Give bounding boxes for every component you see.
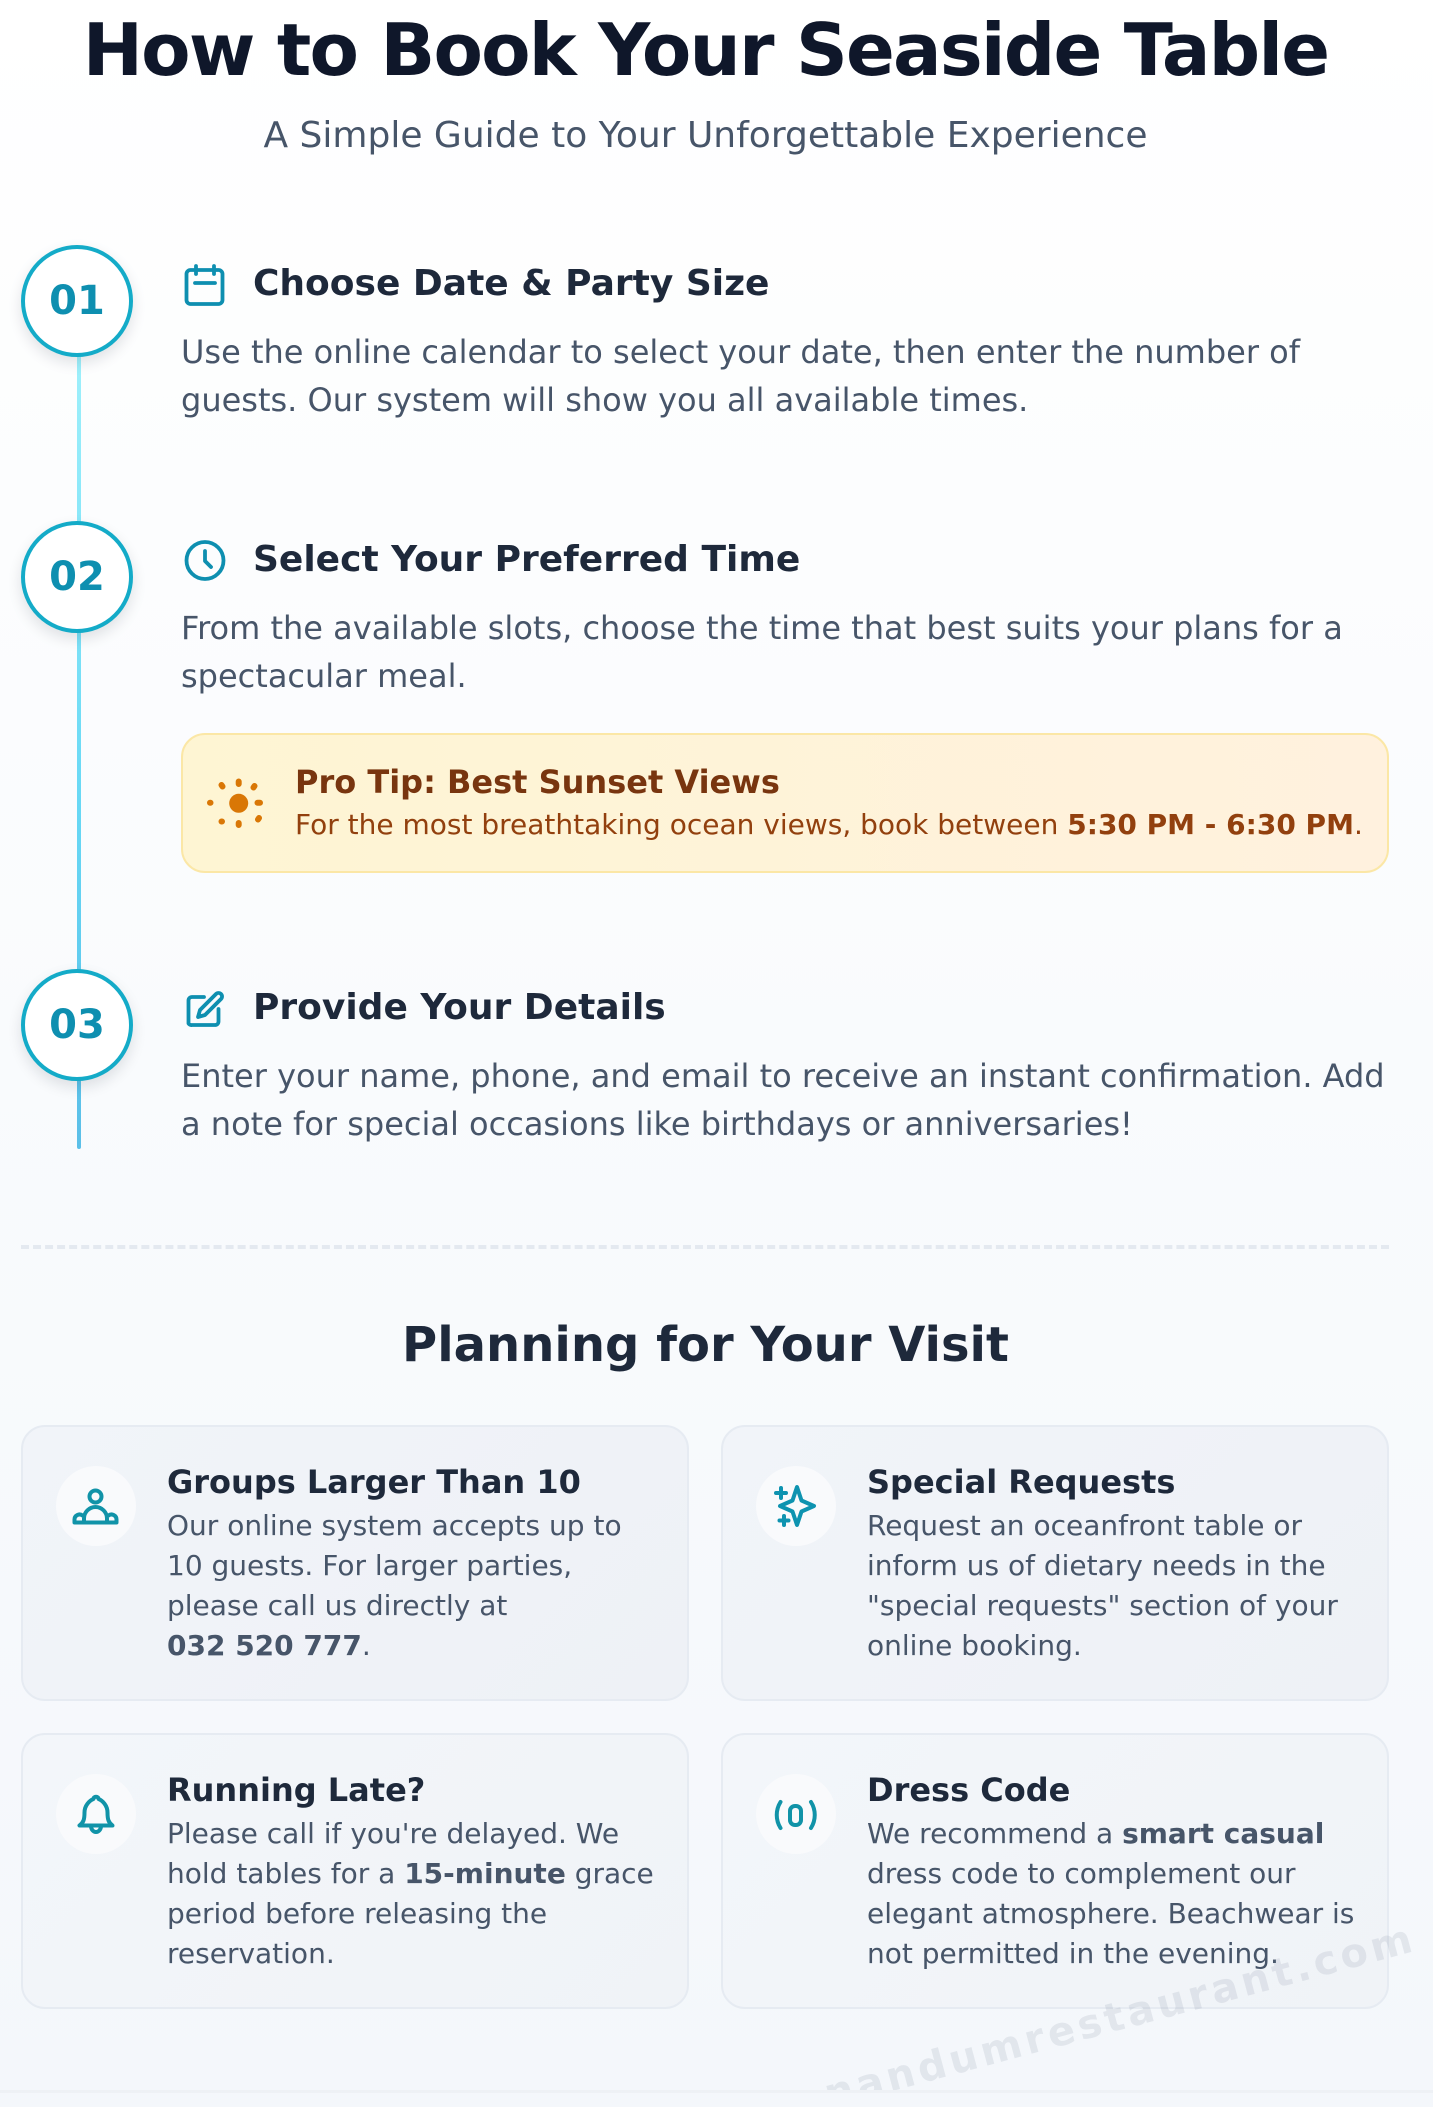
text	[867, 1816, 1354, 1970]
step 2 description: spectacular meal.	[181, 657, 467, 695]
text: inform us of dietary needs in the	[867, 1548, 1326, 1582]
heading: Running Late?	[167, 1770, 425, 1808]
step 2 description	[181, 609, 1343, 695]
icon: group	[56, 1466, 136, 1546]
step 1 number	[21, 245, 133, 357]
heading: Special Requests	[867, 1462, 1175, 1500]
timeline connector line	[77, 300, 81, 1149]
text: hold tables for a 15-minute grace	[167, 1856, 654, 1890]
text: not permitted in the evening.	[867, 1936, 1279, 1970]
icon: clock	[184, 540, 226, 581]
text	[167, 1508, 622, 1662]
step 1 description: guests. Our system will show you all available times.	[181, 381, 1028, 419]
step 3 heading: Provide Your Details	[253, 986, 666, 1028]
step 3 number	[21, 969, 133, 1081]
section heading: Planning for Your Visit	[402, 1317, 1009, 1373]
step 1 description: Use the online calendar to select your date, then enter the number of	[181, 333, 1300, 371]
step 3 description: a note for special occasions like birthdays or anniversaries!	[181, 1105, 1133, 1143]
step 1 heading: Choose Date & Party Size	[253, 262, 769, 304]
text: please call us directly at	[167, 1588, 507, 1622]
callout: pro tip	[181, 733, 1389, 873]
step 2 number: 02	[49, 554, 105, 600]
text	[867, 1508, 1338, 1662]
step 1 description	[181, 333, 1301, 419]
text: We recommend a smart casual	[867, 1816, 1324, 1850]
step 2 heading: Select Your Preferred Time	[253, 538, 800, 580]
icon: dress	[756, 1774, 836, 1854]
title: How to Book Your Seaside Table	[83, 8, 1328, 92]
footer rule	[0, 2090, 1433, 2093]
icon: edit	[186, 991, 224, 1027]
step 2 number	[21, 521, 133, 633]
heading: Dress Code	[867, 1770, 1070, 1808]
step 1 number: 01	[49, 278, 105, 324]
text: Our online system accepts up to	[167, 1508, 622, 1542]
card: special requests	[721, 1425, 1389, 1701]
icon: sparkles	[756, 1466, 836, 1546]
card: running late	[21, 1733, 689, 2009]
icon: bell	[56, 1774, 136, 1854]
text: elegant atmosphere. Beachwear is	[867, 1896, 1354, 1930]
step 3 description	[181, 1057, 1385, 1143]
card: groups	[21, 1425, 689, 1701]
text: 032 520 777.	[167, 1628, 371, 1662]
text: 10 guests. For larger parties,	[167, 1548, 572, 1582]
text: dress code to complement our	[867, 1856, 1296, 1890]
text: reservation.	[167, 1936, 335, 1970]
text: "special requests" section of your	[867, 1588, 1338, 1622]
tip heading: Pro Tip: Best Sunset Views	[295, 763, 780, 801]
text: Please call if you're delayed. We	[167, 1816, 619, 1850]
tip text: For the most breathtaking ocean views, book between 5:30 PM - 6:30 PM.	[295, 808, 1363, 841]
step 3 description: Enter your name, phone, and email to receive an instant confirmation. Add	[181, 1057, 1385, 1095]
subtitle: A Simple Guide to Your Unforgettable Experience	[263, 114, 1148, 156]
text: period before releasing the	[167, 1896, 547, 1930]
heading: Groups Larger Than 10	[167, 1462, 581, 1500]
step 2 description: From the available slots, choose the time that best suits your plans for a	[181, 609, 1343, 647]
text: online booking.	[867, 1628, 1082, 1662]
icon: sun	[207, 778, 263, 828]
step 3 number: 03	[49, 1002, 105, 1048]
text	[167, 1816, 654, 1970]
card: dress code	[721, 1733, 1389, 2009]
icon: calendar	[184, 264, 224, 306]
text: Request an oceanfront table or	[867, 1508, 1302, 1542]
